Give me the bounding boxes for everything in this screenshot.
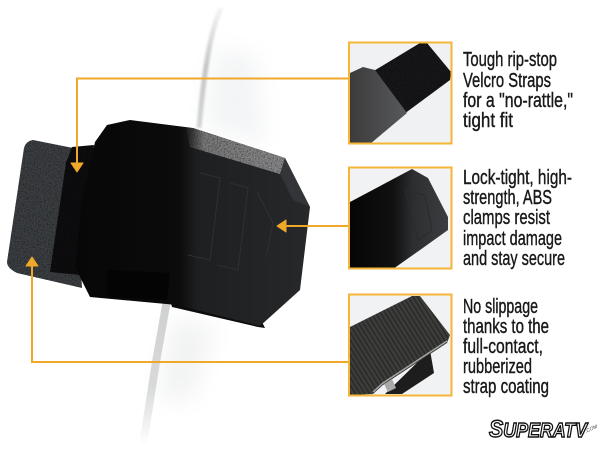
clamp right bevel xyxy=(280,158,310,207)
text: ABS clamps: clamps resist xyxy=(463,207,550,229)
text: rubberized strap: thanks to the xyxy=(463,316,549,338)
text: velcro straps: Tough rip-stop xyxy=(463,49,557,71)
text: ABS clamps: impact damage xyxy=(463,228,562,250)
background shadow below clamp xyxy=(160,320,215,400)
rear strap with rubber coating xyxy=(7,140,82,288)
clamp shadow xyxy=(107,270,170,300)
text: velcro straps: tight fit xyxy=(463,110,513,132)
text: ABS clamps xyxy=(463,167,572,270)
text: rubberized strap: strap coating xyxy=(463,376,549,398)
text: velcro straps xyxy=(463,49,573,132)
text: ABS clamps: strength, ABS xyxy=(463,187,552,209)
embossed logo on clamp xyxy=(188,173,273,270)
velcro strap xyxy=(50,145,94,275)
text: rubberized strap: full-contact, xyxy=(463,336,543,358)
text: rubberized strap: No slippage xyxy=(463,296,538,318)
detail panel: rubberized strap xyxy=(349,294,452,396)
background shadow above clamp xyxy=(205,50,265,145)
text: ABS clamps: and stay secure xyxy=(463,248,565,270)
text: velcro straps: for a "no-rattle," xyxy=(463,90,573,112)
text: rubberized strap: rubberized xyxy=(463,356,532,378)
product photo: strap clamp on white tube xyxy=(7,8,310,445)
arrow: ABS clamp callout xyxy=(277,220,349,232)
detail panel: ABS clamp xyxy=(349,168,452,269)
white tube lower section xyxy=(143,300,167,445)
detail panel: velcro strap xyxy=(349,42,452,144)
clamp body xyxy=(75,120,310,326)
text: rubberized strap xyxy=(463,296,549,398)
arrow: velcro straps callout xyxy=(71,78,349,172)
text: velcro straps: Velcro Straps xyxy=(463,70,551,92)
arrow: rubber coating callout xyxy=(26,257,349,362)
logo: SuperATV: .COM xyxy=(584,424,599,435)
white tube upper section xyxy=(199,8,221,128)
clamp underside xyxy=(170,300,265,328)
logo: SuperATV: SUPERATV xyxy=(489,416,588,443)
clamp lit top edge xyxy=(186,128,285,174)
